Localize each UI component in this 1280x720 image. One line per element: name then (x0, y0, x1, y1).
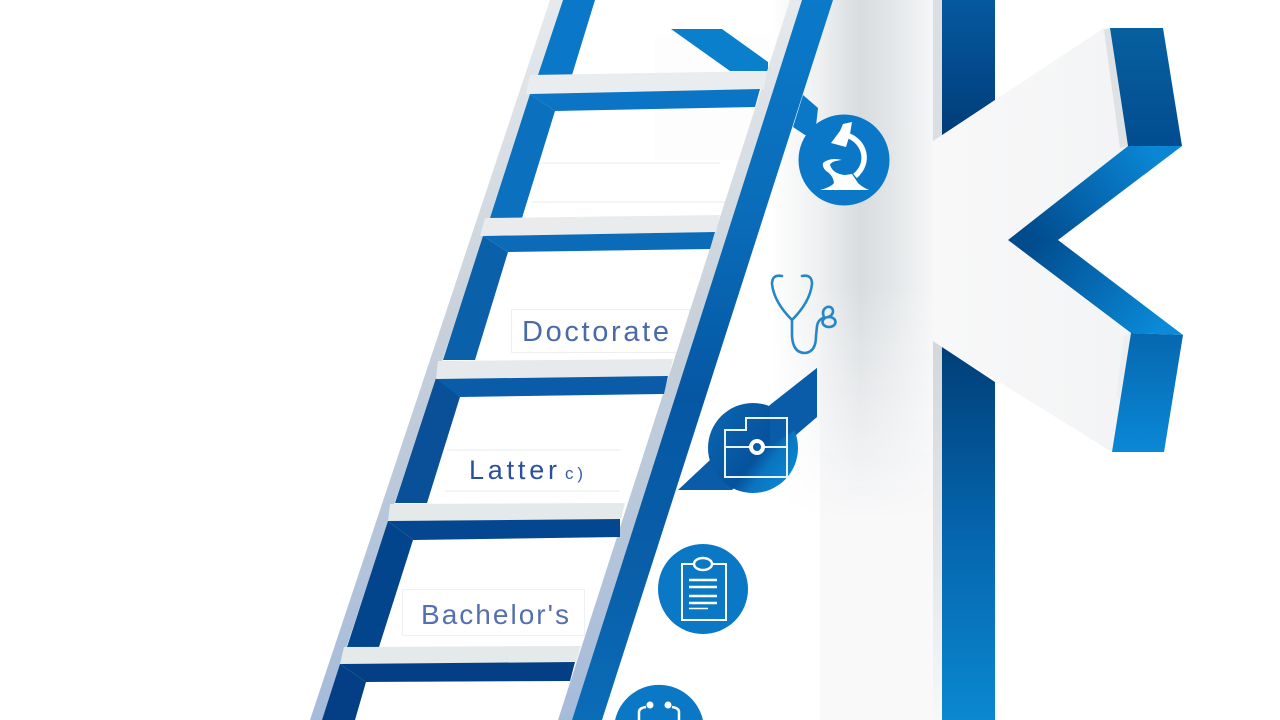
K column face (794, 0, 933, 506)
rung 1 (526, 71, 767, 111)
right rail (572, 0, 833, 720)
icon: clipboard (658, 544, 748, 634)
K arm face (933, 28, 1131, 452)
label: Latter: Latter (469, 455, 557, 485)
label: Doctorate: Doctorate (522, 316, 669, 348)
left rail edge (310, 0, 563, 720)
label: Bachelor's (402, 590, 584, 636)
label: Latter: c) (565, 464, 583, 483)
K lower arm underside (1008, 240, 1183, 335)
label: Bachelor's: Bachelor's (421, 599, 569, 630)
label: Latter (445, 450, 620, 491)
K upper stem side (933, 0, 995, 141)
left rail segments (322, 0, 595, 720)
right rail edge (558, 0, 802, 720)
large letter K (770, 0, 1183, 720)
K lower arm end (1112, 333, 1183, 452)
K upper arm underside (1008, 146, 1182, 240)
top chevron (671, 29, 768, 71)
icon: stethoscope (772, 276, 836, 353)
K upper arm end (1104, 28, 1182, 148)
ladder (310, 0, 833, 720)
infographic canvas (310, 0, 1183, 720)
icon: briefcase (678, 368, 817, 493)
rung 2 (480, 215, 720, 252)
icon: stethoscope badge (615, 685, 703, 720)
label: Doctorate (512, 310, 690, 352)
icon: microscope (793, 95, 890, 206)
rung 4 (388, 503, 625, 540)
rung 5 (340, 646, 581, 682)
rung 3 (436, 359, 673, 397)
K lower stem side (933, 341, 995, 720)
label box: empty (532, 163, 725, 202)
